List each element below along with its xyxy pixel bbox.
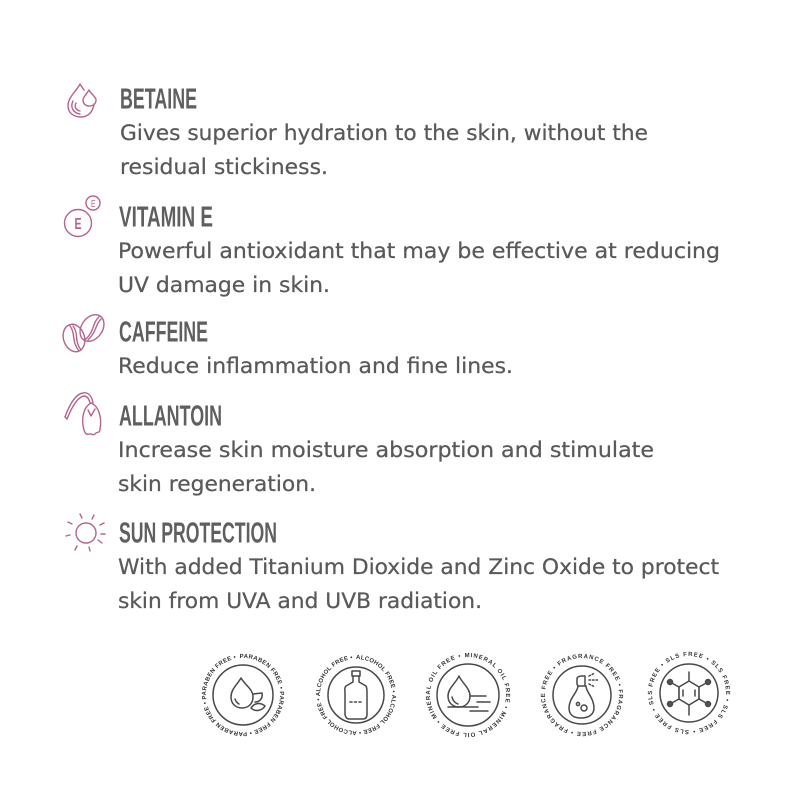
text: betaine description: residual stickiness. — [120, 155, 328, 179]
badge: paraben free: PARABEN FREE • PARABEN FREE • PARABEN FREE • PARABEN FREE • — [202, 654, 284, 736]
heading: caffeine: CAFFEINE — [119, 316, 208, 348]
icon: drop with leaves — [231, 678, 265, 710]
badge: mineral oil free: MINERAL OIL FREE • MINERAL OIL FREE • MINERAL OIL FREE • — [426, 652, 510, 738]
icon: oil drop and spill — [448, 676, 490, 711]
icon: vitamin e circles: E — [74, 216, 82, 233]
text: vitamin e description: UV damage in skin. — [118, 273, 330, 297]
icon: spray bottle — [569, 673, 598, 718]
heading: vitamin e: VITAMIN E — [119, 202, 213, 234]
icon: sun — [66, 514, 105, 551]
section: sun protection — [66, 514, 719, 613]
text: allantoin description: skin regeneration. — [118, 472, 316, 496]
text: vitamin e description — [118, 239, 720, 297]
text: vitamin e description: Powerful antioxidant that may be effective at reducing — [118, 239, 720, 263]
icon: vitamin e circles — [64, 196, 100, 236]
text: sun protection description: With added Titanium Dioxide and Zinc Oxide to protect — [118, 555, 719, 579]
badge: alcohol free: ALCOHOL FREE • ALCOHOL FREE • ALCOHOL FREE • ALCOHOL FREE • — [316, 654, 396, 736]
text: allantoin description: Increase skin moisture absorption and stimulate — [118, 438, 654, 462]
text: betaine description: Gives superior hydration to the skin, without the — [120, 121, 648, 145]
badge row — [202, 652, 730, 738]
heading: betaine: BETAINE — [120, 84, 197, 116]
icon: drooping flower — [65, 393, 101, 435]
section: betaine — [68, 84, 648, 179]
section: vitamin e — [64, 196, 720, 297]
icon: coffee beans — [60, 310, 109, 355]
badge: fragrance free: FRAGRANCE FREE • FRAGRANCE FREE • FRAGRANCE FREE • — [540, 654, 624, 736]
heading: sun protection: SUN PROTECTION — [119, 518, 277, 550]
text: allantoin description — [118, 438, 654, 496]
icon: bottle — [345, 671, 367, 719]
text: caffeine description: Reduce inflammation and fine lines. — [118, 354, 513, 378]
text: sun protection description: skin from UVA and UVB radiation. — [118, 589, 482, 613]
icon: molecule — [668, 672, 710, 715]
text: betaine description — [120, 121, 648, 179]
section: allantoin — [65, 393, 654, 496]
heading: allantoin: ALLANTOIN — [119, 400, 222, 432]
icon: water drops — [68, 84, 96, 117]
icon: vitamin e circles: E — [91, 199, 96, 210]
section: caffeine — [60, 310, 513, 378]
badge: sls free: SLS FREE • SLS FREE • SLS FREE • SLS FREE • SLS FREE • — [648, 652, 730, 734]
text: sun protection description — [118, 555, 719, 613]
